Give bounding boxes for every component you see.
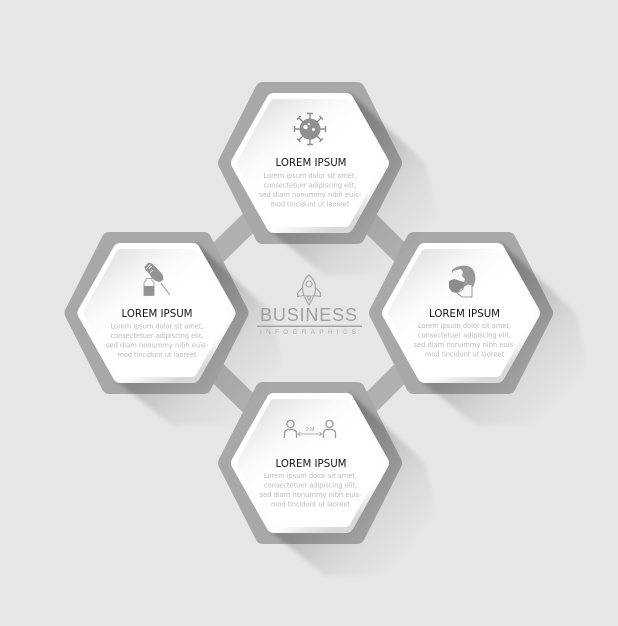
icon: two people two metres apart: 2 M: [306, 427, 314, 433]
text block: [260, 471, 362, 509]
text block: mod tincidunt ut laoreet: [270, 200, 350, 208]
text block: sed diam nonummy nibh euis-: [260, 490, 362, 499]
text block: [106, 322, 208, 359]
heading: business: BUSINESS: [260, 305, 357, 325]
heading: LOREM IPSUM: [276, 458, 346, 470]
text block: sed diam nonummy nibh euis-: [414, 340, 516, 349]
icon: rocket: [298, 275, 320, 305]
text block: sed diam nonummy nibh euis-: [259, 190, 361, 199]
text block: consectetuer adipiscing elit,: [264, 481, 357, 490]
text block: [259, 171, 361, 208]
text block: mod tincidunt ut laoreet: [118, 350, 197, 359]
subheading: infographics: INFOGRAPHICS: [260, 329, 357, 336]
text block: sed diam nonummy nibh euis-: [106, 341, 208, 350]
panel: bottom hexagon: [239, 401, 381, 525]
text block: Lorem ipsum dolor sit amet,: [264, 471, 357, 480]
text block: mod tincidunt ut laoreet: [271, 500, 350, 509]
center logo: [257, 275, 362, 336]
text block: Lorem ipsum dolor sit amet,: [418, 321, 511, 330]
connector ring: [156, 163, 461, 463]
panel: right hexagon: [390, 251, 532, 375]
text block: Lorem ipsum dolor sit amet,: [264, 171, 356, 180]
heading: LOREM IPSUM: [429, 308, 500, 320]
divider line: [257, 326, 362, 327]
text block: consectetuer adipiscing elit,: [264, 180, 356, 190]
text block: consectetuer adipiscing elit,: [418, 331, 511, 340]
text block: mod tincidunt ut laoreet: [425, 350, 504, 359]
text block: consectetuer adipiscing elit,: [110, 331, 204, 340]
text block: [414, 321, 516, 359]
text block: Lorem ipsum dolor sit amet,: [110, 322, 204, 331]
icon: virus: [294, 114, 326, 144]
long shadows: [116, 93, 589, 575]
panel: left hexagon: [86, 251, 228, 375]
panel: top hexagon: [239, 101, 381, 225]
heading: LOREM IPSUM: [276, 157, 346, 169]
icon: syringe and vial: [144, 262, 170, 296]
icon: head with mask: [449, 266, 475, 297]
icon: two people two metres apart: [284, 420, 336, 438]
heading: LOREM IPSUM: [122, 308, 192, 320]
outer grey hexagons: [72, 90, 545, 536]
